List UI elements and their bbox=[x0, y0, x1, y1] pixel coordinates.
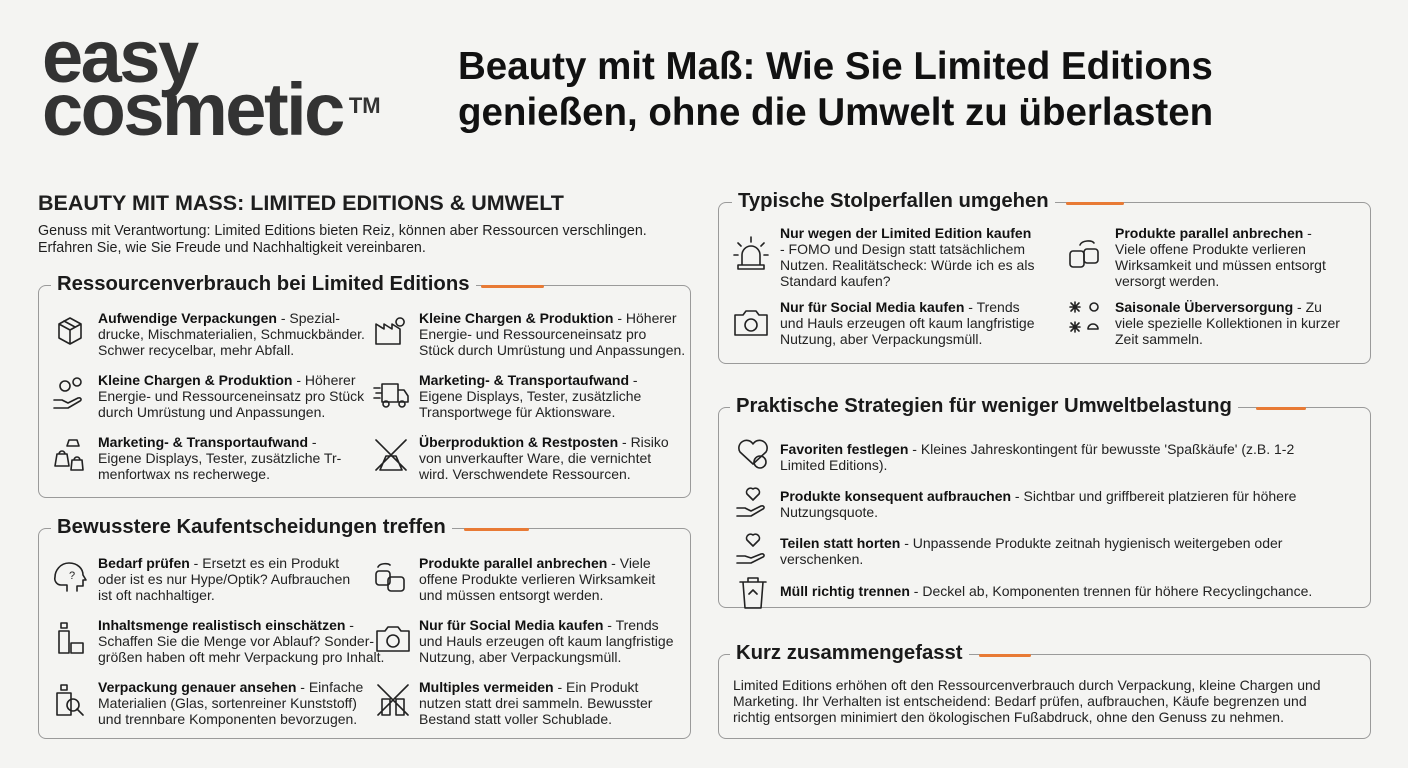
title: genießen, ohne die Umwelt zu überlasten bbox=[458, 91, 1213, 134]
item: oder ist es nur Hype/Optik? Aufbrauchen bbox=[98, 571, 350, 587]
item: Nur für Social Media kaufen - Trends bbox=[780, 299, 1020, 315]
icon: brain bbox=[54, 562, 87, 592]
item: und Hauls erzeugen oft kaum langfristige bbox=[780, 315, 1034, 331]
item: drucke, Mischmaterialien, Schmuckbänder. bbox=[98, 326, 365, 342]
item bbox=[419, 679, 652, 727]
item: Nutzen. Realitätscheck: Würde ich es als bbox=[780, 257, 1034, 273]
item: Müll richtig trennen - Deckel ab, Komponenten trennen für höhere Recyclingchance. bbox=[780, 583, 1312, 599]
panel: Strategien bbox=[718, 407, 1371, 608]
icon: crossed bbox=[375, 439, 407, 471]
item bbox=[98, 617, 384, 665]
summary text: Marketing. Ihr Verhalten ist entscheidend: Bedarf prüfen, aufbrauchen, Käufe begrenzen und bbox=[733, 693, 1307, 709]
icon: camera bbox=[376, 626, 410, 652]
section heading: BEAUTY MIT MASS: LIMITED EDITIONS & UMWELT bbox=[38, 191, 564, 215]
item: viele spezielle Kollektionen in kurzer bbox=[1115, 315, 1340, 331]
item: Eigene Displays, Tester, zusätzliche bbox=[419, 388, 641, 404]
icon: jars bbox=[375, 562, 405, 592]
item: Marketing- & Transportaufwand - bbox=[419, 372, 638, 388]
heading: Kurz zusammengefasst bbox=[736, 642, 963, 664]
panel: Ressourcenverbrauch bbox=[38, 285, 691, 498]
item: Teilen statt horten - Unpassende Produkte zeitnah hygienisch weitergeben oder bbox=[780, 535, 1282, 551]
item bbox=[98, 310, 365, 358]
item bbox=[98, 372, 364, 420]
panel: Kurz zusammengefasst bbox=[718, 654, 1371, 739]
item: und Hauls erzeugen oft kaum langfristige bbox=[419, 633, 673, 649]
item bbox=[419, 434, 669, 482]
item: Transportwege für Aktionsware. bbox=[419, 404, 615, 420]
item bbox=[98, 555, 350, 603]
item: Nutzung, aber Verpackungsmüll. bbox=[780, 331, 982, 347]
item: größen haben oft mehr Verpackung pro Inhalt. bbox=[98, 649, 384, 665]
item: Energie- und Ressourceneinsatz pro Stück bbox=[98, 388, 364, 404]
title: Beauty mit Maß: Wie Sie Limited Editions bbox=[458, 45, 1213, 88]
item: Zeit sammeln. bbox=[1115, 331, 1203, 347]
item: Viele offene Produkte verlieren bbox=[1115, 241, 1306, 257]
icon: jars bbox=[1069, 240, 1099, 268]
item: Multiples vermeiden - Ein Produkt bbox=[419, 679, 638, 695]
item: Verpackung genauer ansehen - Einfache bbox=[98, 679, 363, 695]
logo: cosmetic TM bbox=[42, 68, 381, 151]
item: und müssen entsorgt werden. bbox=[419, 587, 603, 603]
item: Favoriten festlegen - Kleines Jahreskontingent für bewusste 'Spaßkäufe' (z.B. 1-2 bbox=[780, 441, 1294, 457]
intro text: Erfahren Sie, wie Sie Freude und Nachhaltigkeit vereinbaren. bbox=[38, 240, 426, 256]
logo: easy bbox=[42, 15, 197, 98]
item: menfortwax ns recherwege. bbox=[98, 466, 270, 482]
item bbox=[780, 535, 1282, 567]
item: Aufwendige Verpackungen - Spezial- bbox=[98, 310, 340, 326]
icon: bottle bbox=[58, 622, 84, 654]
item: Kleine Chargen & Produktion - Höherer bbox=[98, 372, 356, 388]
icon: boxes bbox=[58, 317, 82, 345]
item bbox=[780, 225, 1034, 289]
item: Überproduktion & Restposten - Risiko bbox=[419, 434, 669, 450]
icon: factory bbox=[375, 317, 405, 345]
panel: Bewusstere Kaufentscheidungen bbox=[38, 528, 691, 739]
item: verschenken. bbox=[780, 551, 863, 567]
item bbox=[780, 299, 1034, 347]
item: versorgt werden. bbox=[1115, 273, 1219, 289]
item bbox=[419, 372, 641, 420]
summary text: Limited Editions erhöhen oft den Ressourcenverbrauch durch Verpackung, kleine Chargen und bbox=[733, 677, 1321, 693]
intro text bbox=[38, 223, 647, 256]
item bbox=[1115, 225, 1326, 289]
intro text: Genuss mit Verantwortung: Limited Editions bieten Reiz, können aber Ressourcen verschlingen. bbox=[38, 223, 647, 239]
icon: alarm bbox=[733, 236, 769, 270]
icon: hand heart bbox=[736, 487, 765, 517]
item bbox=[98, 679, 363, 727]
item: Kleine Chargen & Produktion - Höherer bbox=[419, 310, 676, 326]
icon: magnifier bottle bbox=[56, 684, 84, 716]
icon: bin bbox=[734, 574, 772, 612]
icon: camera bbox=[734, 310, 768, 336]
item: Bestand statt voller Schublade. bbox=[419, 711, 612, 727]
item: Stück durch Umrüstung und Anpassungen. bbox=[419, 342, 685, 358]
item: nutzen statt drei sammeln. Bewusster bbox=[419, 695, 652, 711]
item bbox=[780, 488, 1296, 520]
icon: seasons bbox=[1069, 301, 1099, 333]
item: wird. Verschwendete Ressourcen. bbox=[419, 466, 631, 482]
item: Produkte parallel anbrechen - bbox=[1115, 225, 1312, 241]
item: Schaffen Sie die Menge vor Ablauf? Sonder- bbox=[98, 633, 374, 649]
item: Nur für Social Media kaufen - Trends bbox=[419, 617, 659, 633]
item: Nur wegen der Limited Edition kaufen bbox=[780, 225, 1031, 241]
icon: brain: ? bbox=[69, 570, 75, 582]
icon: hand gear bbox=[53, 377, 82, 409]
summary text bbox=[733, 677, 1321, 725]
item bbox=[419, 617, 673, 665]
icon: crossed bottles bbox=[377, 684, 409, 716]
item: Limited Editions). bbox=[780, 457, 887, 473]
item: offene Produkte verlieren Wirksamkeit bbox=[419, 571, 655, 587]
item bbox=[1115, 299, 1340, 347]
item bbox=[419, 555, 656, 603]
item: Nutzung, aber Verpackungsmüll. bbox=[419, 649, 621, 665]
logo bbox=[42, 15, 381, 151]
item: Wirksamkeit und müssen entsorgt bbox=[1115, 257, 1326, 273]
accent line bbox=[1256, 407, 1306, 410]
item: ist oft nachhaltiger. bbox=[98, 587, 215, 603]
panel: Stolperfallen bbox=[718, 202, 1371, 364]
title bbox=[458, 45, 1213, 134]
item: Marketing- & Transportaufwand - bbox=[98, 434, 317, 450]
item: Materialien (Glas, sortenreiner Kunststoff) bbox=[98, 695, 357, 711]
accent line bbox=[979, 654, 1031, 657]
item: durch Umrüstung und Anpassungen. bbox=[98, 404, 325, 420]
heading: Praktische Strategien für weniger Umweltbelastung bbox=[736, 395, 1232, 417]
item: - FOMO und Design statt tatsächlichem bbox=[780, 241, 1025, 257]
summary text: richtig entsorgen minimiert den ökologischen Fußabdruck, ohne den Genuss zu nehmen. bbox=[733, 709, 1284, 725]
item: Produkte parallel anbrechen - Viele bbox=[419, 555, 651, 571]
accent line bbox=[1066, 202, 1124, 205]
item: von unverkaufter Ware, die vernichtet bbox=[419, 450, 651, 466]
icon: heart bbox=[738, 440, 768, 469]
heading: Typische Stolperfallen umgehen bbox=[738, 190, 1049, 212]
accent line bbox=[464, 528, 529, 531]
icon: truck bbox=[373, 383, 409, 408]
item bbox=[419, 310, 685, 358]
item: Eigene Displays, Tester, zusätzliche Tr- bbox=[98, 450, 341, 466]
icon: bags bbox=[54, 439, 84, 471]
icon: heart share bbox=[736, 533, 765, 564]
item bbox=[98, 434, 341, 482]
item bbox=[780, 441, 1294, 473]
item: Bedarf prüfen - Ersetzt es ein Produkt bbox=[98, 555, 339, 571]
item: Schwer recycelbar, mehr Abfall. bbox=[98, 342, 294, 358]
heading: Bewusstere Kaufentscheidungen treffen bbox=[57, 516, 446, 538]
item: Energie- und Ressourceneinsatz pro bbox=[419, 326, 646, 342]
heading: Ressourcenverbrauch bei Limited Editions bbox=[57, 273, 470, 295]
item: und trennbare Komponenten bevorzugen. bbox=[98, 711, 357, 727]
item: Inhaltsmenge realistisch einschätzen - bbox=[98, 617, 354, 633]
item: Produkte konsequent aufbrauchen - Sichtbar und griffbereit platzieren für höhere bbox=[780, 488, 1296, 504]
item: Standard kaufen? bbox=[780, 273, 891, 289]
accent line bbox=[481, 285, 544, 288]
item: Nutzungsquote. bbox=[780, 504, 878, 520]
item: Saisonale Überversorgung - Zu bbox=[1115, 299, 1322, 315]
